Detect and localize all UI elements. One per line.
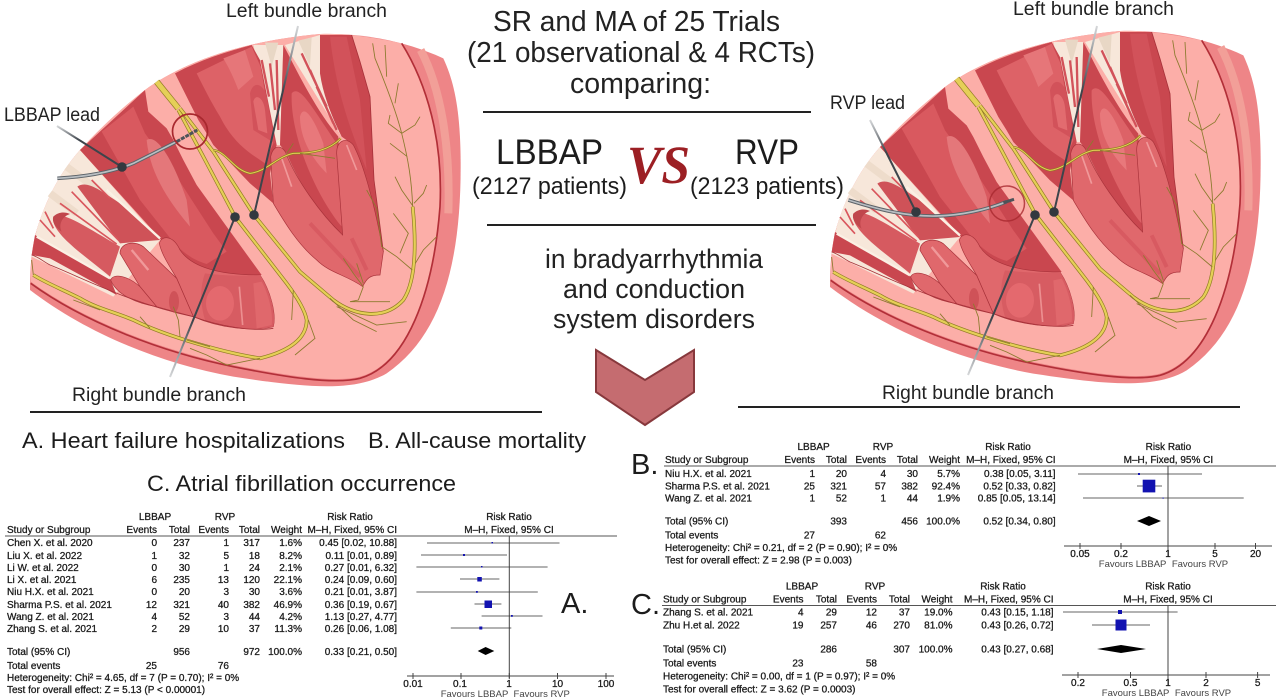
forest plot A: 0.36 [0.19, 0.67]	[325, 600, 397, 611]
forest plot A: LBBAP	[139, 512, 171, 523]
forest plot A: 46.9%	[274, 600, 302, 611]
forest plot A: 20	[179, 587, 190, 598]
forest plot C: 286	[820, 644, 837, 656]
forest plot B: 5	[1212, 549, 1218, 560]
forest plot C: 257	[820, 620, 837, 632]
forest plot B: Heterogeneity: Chi² = 0.21, df = 2 (P = 0.90); I² = 0%	[665, 543, 897, 554]
forest plot B: 44	[907, 494, 918, 504]
forest plot A: 3	[223, 587, 229, 598]
forest plot B: 4	[880, 469, 886, 480]
label: RVP lead: RVP lead	[830, 93, 905, 114]
population text	[545, 244, 764, 334]
forest plot B: Favours RVP	[1172, 559, 1228, 570]
forest plot B: Total events	[665, 530, 718, 542]
forest plot A: Sharma P.S. et al. 2021	[7, 600, 112, 611]
forest plot A: Liu X. et al. 2022	[7, 551, 82, 562]
forest plot A: 317	[243, 538, 260, 549]
forest plot A: Favours RVP	[514, 689, 570, 700]
forest plot B: Risk Ratio	[1146, 442, 1192, 453]
target circle: RVP lead site	[990, 186, 1024, 221]
forest plot B: 1	[809, 494, 815, 504]
forest plot A: Wang Z. et al. 2021	[7, 612, 94, 623]
forest plot C: 81.0%	[924, 620, 953, 632]
forest plot A: 40	[218, 600, 229, 611]
forest plot A: Events	[198, 525, 229, 536]
forest plot C: Weight	[922, 594, 953, 606]
forest plot B: 321	[830, 482, 847, 492]
forest plot A: M–H, Fixed, 95% CI	[464, 525, 554, 536]
forest plot B: 0.52 [0.34, 0.80]	[983, 516, 1056, 528]
forest plot A: Test for overall effect: Z = 5.13 (P < 0.00001)	[7, 685, 205, 696]
forest plot B: 1	[1165, 549, 1171, 560]
forest plot A: 1.13 [0.27, 4.77]	[325, 612, 397, 623]
forest plot A: 321	[173, 600, 190, 611]
title block: comparing:	[570, 68, 711, 100]
forest plot A: Study or Subgroup	[7, 525, 91, 536]
forest plot A: 1.6%	[279, 538, 302, 549]
forest plot C: LBBAP	[786, 582, 818, 592]
forest plot C: 58	[866, 658, 877, 670]
LV shapes drawn in the upper-right crop space	[175, 35, 383, 287]
comparison: LBBAP group: LBBAP	[496, 133, 603, 172]
forest plot B: Risk Ratio	[985, 442, 1031, 453]
forest plot C: 100.0%	[919, 644, 953, 656]
forest plot B: 1	[809, 469, 815, 480]
arrow: chevron down	[596, 350, 694, 425]
lead: RVP lead wire	[848, 199, 1014, 216]
forest plot B: Test for overall effect: Z = 2.98 (P = 0.003)	[665, 556, 852, 566]
forest plot A: 0.21 [0.01, 3.87]	[325, 587, 397, 598]
forest plot A: Total events	[7, 661, 60, 672]
forest plot C: 12	[866, 608, 877, 618]
forest plot A: 29	[179, 624, 190, 635]
forest plot A: 6	[151, 575, 157, 586]
forest plot A: 30	[249, 587, 260, 598]
forest plot C: 37	[899, 608, 910, 618]
forest plot C: Events	[846, 594, 877, 606]
forest plot B: M–H, Fixed, 95% CI	[966, 455, 1056, 466]
forest plot A: 2.1%	[279, 563, 302, 574]
forest plot A: Risk Ratio	[486, 512, 532, 523]
forest plot B: Study or Subgroup	[665, 455, 749, 466]
forest plot A: 1	[151, 551, 157, 562]
forest plot A: 0.11 [0.01, 0.89]	[325, 551, 397, 562]
forest plot A: 4.2%	[279, 612, 302, 623]
forest plot C: 46	[866, 620, 877, 632]
forest plot C: Zhu H.et al. 2022	[663, 620, 740, 632]
forest plot B: 393	[830, 516, 847, 528]
forest plot B: 382	[901, 482, 918, 492]
section rule right	[738, 406, 1240, 408]
forest plot A: 5	[223, 551, 229, 562]
forest plot B: RVP	[873, 442, 894, 453]
forest plot A: Li X. et al. 2021	[7, 575, 77, 586]
forest plot B: Total	[826, 455, 847, 466]
forest plot B: 30	[907, 469, 918, 480]
forest plot B: LBBAP	[797, 442, 830, 453]
forest plot B: 52	[836, 494, 847, 504]
heading: outcome C: C. Atrial fibrillation occurrence	[147, 471, 456, 496]
forest plot A: 52	[179, 612, 190, 623]
forest plot A	[5, 512, 617, 700]
forest plot C: Total events	[663, 658, 716, 670]
forest plot B: 1	[880, 494, 886, 504]
forest plot A: Li W. et al. 2022	[7, 563, 79, 574]
population text: in bradyarrhythmia	[545, 244, 764, 274]
forest plot C: 4	[798, 608, 804, 618]
forest plot A: 382	[243, 600, 260, 611]
forest plot B: 456	[901, 516, 918, 528]
forest plot A: 2	[151, 624, 157, 635]
forest plot A: 972	[243, 647, 260, 658]
forest plot B: Niu H.X. et al. 2021	[665, 469, 752, 480]
forest plot C: Total	[816, 594, 837, 606]
forest plot B: 1.9%	[937, 494, 960, 504]
RV shapes drawn in the lower-left crop space	[32, 90, 274, 329]
forest plot A: 12	[146, 600, 157, 611]
forest plot C: 19.0%	[924, 608, 953, 618]
comparison: RVP group: RVP	[735, 133, 799, 172]
forest plot C: Risk Ratio	[1145, 582, 1191, 592]
forest plot C: Zhang S. et al. 2021	[663, 608, 754, 618]
forest plot B: 25	[804, 482, 815, 492]
comparison: LBBAP group	[472, 133, 627, 200]
forest plot C: Total	[889, 594, 910, 606]
forest plot A: Favours LBBAP	[441, 689, 508, 700]
leader lines and nodes: left heart	[57, 26, 298, 377]
forest plot A: RVP	[215, 512, 236, 523]
left heart illustration: LBBAP	[30, 26, 461, 386]
forest plot A: 13	[218, 575, 229, 586]
rule above comparison	[483, 111, 811, 113]
label: Left bundle branch (left): Left bundle branch	[226, 1, 387, 22]
forest plot C: Favours RVP	[1175, 688, 1231, 699]
lead: LBBAP lead wire	[57, 130, 197, 178]
forest plot B: 0.38 [0.05, 3.11]	[984, 469, 1056, 480]
forest plot A: 956	[173, 647, 190, 658]
forest plot A: 120	[243, 575, 260, 586]
right heart illustration: RVP	[830, 31, 1261, 383]
forest plot B: 5.7%	[937, 469, 960, 480]
label: LBBAP lead: LBBAP lead	[4, 105, 100, 126]
forest plot C: 0.5	[1124, 678, 1138, 689]
forest plot C: 23	[792, 658, 804, 670]
forest plot A: Niu H.X. et al. 2021	[7, 587, 94, 598]
forest plot A: 3	[223, 612, 229, 623]
comparison: VS: VS	[627, 135, 690, 195]
forest plot A: 235	[173, 575, 190, 586]
forest plot A: 1	[506, 679, 512, 690]
forest plot B: 0.52 [0.33, 0.82]	[983, 482, 1056, 492]
forest plot A: 0	[151, 587, 157, 598]
forest plot B: 0.2	[1114, 549, 1128, 560]
forest plot A: 0.24 [0.09, 0.60]	[325, 575, 397, 586]
forest plot A: 4	[151, 612, 157, 623]
forest plot C: 270	[893, 620, 910, 632]
forest plot C	[662, 582, 1276, 699]
forest plot A: 44	[249, 612, 260, 623]
forest plot C: Favours LBBAP	[1102, 688, 1169, 699]
forest plot C: Events	[773, 594, 804, 606]
title block: (21 observational & 4 RCTs)	[467, 37, 815, 69]
forest plot A: 1	[223, 538, 229, 549]
rule below comparison	[487, 224, 816, 226]
forest plot A: 237	[173, 538, 190, 549]
forest plot A: 18	[249, 551, 260, 562]
forest plot A: Heterogeneity: Chi² = 4.65, df = 7 (P = 0.70); I² = 0%	[7, 673, 239, 684]
forest plot B: 20	[1250, 549, 1261, 560]
forest plot B: Favours LBBAP	[1099, 559, 1166, 570]
forest plot A: 8.2%	[279, 551, 302, 562]
forest plot A: 0.33 [0.21, 0.50]	[325, 647, 397, 658]
forest plot A: 0.26 [0.06, 1.08]	[325, 624, 397, 635]
panel letter A: A.	[561, 588, 588, 620]
forest plot C: 29	[826, 608, 837, 618]
forest plot B	[664, 442, 1276, 570]
forest plot B: M–H, Fixed, 95% CI	[1124, 455, 1213, 466]
forest plot A: Weight	[271, 525, 302, 536]
forest plot A: Total (95% CI)	[7, 647, 70, 658]
forest plot C: M–H, Fixed, 95% CI	[964, 594, 1054, 606]
forest plot C: 19	[792, 620, 804, 632]
label: Right bundle branch (left): Right bundle branch	[72, 385, 246, 406]
forest plot A: 0.45 [0.02, 10.88]	[319, 538, 397, 549]
forest plot C: 1	[1165, 678, 1171, 689]
forest plot B: Total	[897, 455, 918, 466]
forest plot B: 92.4%	[932, 482, 960, 492]
forest plot A: Total	[169, 525, 190, 536]
panel letter C: C.	[631, 589, 660, 621]
forest plot B: 27	[804, 530, 815, 542]
forest plot A: 25	[146, 661, 157, 672]
forest plot A: M–H, Fixed, 95% CI	[308, 525, 397, 536]
forest plot A: 30	[179, 563, 190, 574]
forest plot A: 22.1%	[274, 575, 302, 586]
forest plot C: Risk Ratio	[980, 582, 1026, 592]
forest plot B: 0.05	[1070, 549, 1090, 560]
forest plot B: 100.0%	[926, 516, 960, 528]
forest plot C: 5	[1255, 678, 1261, 689]
label: Right bundle branch (right): Right bundle branch	[882, 383, 1054, 404]
forest plot C: 2	[1203, 678, 1209, 689]
forest plot B: Weight	[929, 455, 960, 466]
forest plot A: Zhang S. et al. 2021	[7, 624, 98, 635]
forest plot A: 1	[223, 563, 229, 574]
forest plot A: 10	[552, 679, 563, 690]
population text: and conduction	[563, 274, 745, 304]
forest plot A: 0.01	[403, 679, 423, 690]
forest plot A: 24	[249, 563, 260, 574]
panel letter B: B.	[631, 449, 658, 481]
forest plot A: Events	[126, 525, 157, 536]
leader lines and nodes: right heart	[870, 26, 1097, 375]
forest plot C: 0.43 [0.26, 0.72]	[981, 620, 1054, 632]
title block: SR and MA of 25 Trials	[493, 6, 780, 38]
forest plot C: 0.2	[1071, 678, 1085, 689]
forest plot C: Total (95% CI)	[663, 644, 726, 656]
population text: system disorders	[553, 304, 755, 334]
forest plot A: 0	[151, 538, 157, 549]
heading: outcome B: B. All-cause mortality	[368, 428, 586, 453]
forest plot A: 37	[249, 624, 260, 635]
forest plot B: Events	[855, 455, 886, 466]
forest plot C: 307	[893, 644, 910, 656]
comparison: RVP group	[690, 133, 844, 200]
forest plot C: Study or Subgroup	[663, 594, 747, 606]
forest plot C: Heterogeneity: Chi² = 0.00, df = 1 (P = 0.97); I² = 0%	[663, 672, 895, 682]
forest plot A: Risk Ratio	[327, 512, 373, 523]
forest plot C: 0.43 [0.15, 1.18]	[981, 608, 1054, 618]
forest plot A: 3.6%	[279, 587, 302, 598]
forest plot A: Chen X. et al. 2020	[7, 538, 93, 549]
forest plot B: Events	[784, 455, 815, 466]
comparison: RVP group: (2123 patients)	[690, 173, 844, 200]
forest plot B: 57	[875, 482, 886, 492]
forest plot A: 10	[218, 624, 229, 635]
forest plot A: 11.3%	[274, 624, 302, 635]
heading: outcome A: A. Heart failure hospitalizations	[22, 428, 345, 453]
forest plot C: M–H, Fixed, 95% CI	[1123, 594, 1213, 606]
forest plot A: 0.27 [0.01, 6.32]	[325, 563, 397, 574]
forest plot C: 0.43 [0.27, 0.68]	[981, 644, 1054, 656]
title block	[467, 6, 815, 100]
section rule left	[30, 411, 542, 413]
forest plot A: Total	[239, 525, 260, 536]
target circle: LBBAP lead site	[172, 114, 208, 149]
forest plot C: RVP	[865, 582, 886, 592]
forest plot B: 20	[836, 469, 847, 480]
comparison: LBBAP group: (2127 patients)	[472, 173, 627, 200]
forest plot A: 0.1	[453, 679, 467, 690]
forest plot B: Wang Z. et al. 2021	[665, 494, 752, 504]
forest plot A: 0	[151, 563, 157, 574]
forest plot A: 76	[218, 661, 229, 672]
forest plot B: 62	[875, 530, 886, 542]
forest plot A: 100.0%	[268, 647, 302, 658]
forest plot A: 32	[179, 551, 190, 562]
forest plot B: Total (95% CI)	[665, 516, 728, 528]
forest plot A: 100	[598, 679, 615, 690]
forest plot B: 0.85 [0.05, 13.14]	[978, 494, 1056, 504]
forest plot B: Sharma P.S. et al. 2021	[665, 482, 770, 492]
forest plot C: Test for overall effect: Z = 3.62 (P = 0.0003)	[663, 684, 856, 696]
